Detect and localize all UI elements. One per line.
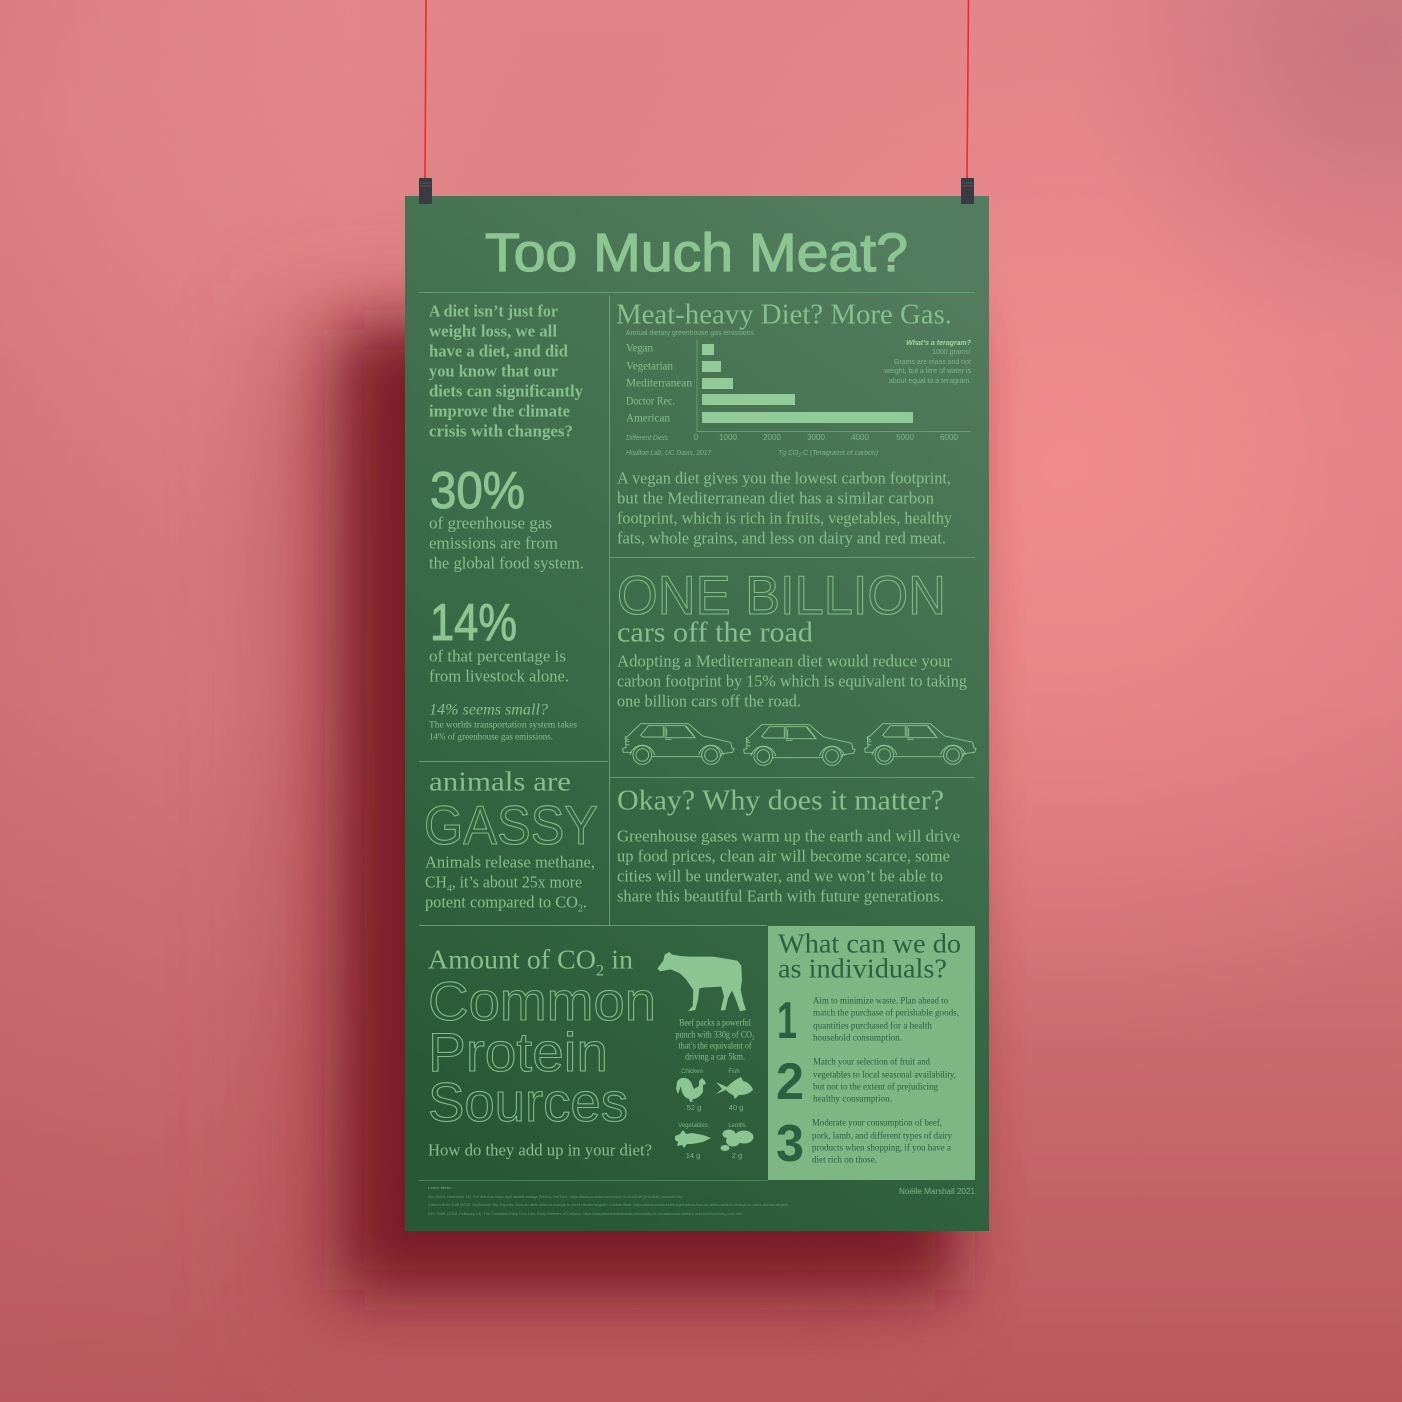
title: Too Much Meat? — [485, 223, 908, 283]
panel: common protein sources: Amount of CO — [428, 945, 590, 975]
step 2: healthy consumption. — [813, 1095, 892, 1105]
panel: why does it matter — [617, 786, 960, 906]
bar chart: 1000 — [719, 433, 737, 442]
bar chart: Vegetarian — [626, 361, 673, 373]
step 1: household consumption. — [813, 1034, 902, 1044]
intro text: A diet isn’t just for — [429, 302, 558, 321]
icon: carrot — [675, 1123, 711, 1160]
icon: fish: Fish — [728, 1069, 740, 1075]
bar chart: Mediterranean — [626, 378, 692, 390]
panel: animals are gassy: Animals release methane, — [425, 853, 595, 872]
bar chart: 2000 — [763, 433, 781, 442]
icon: carrot: 14 g — [686, 1151, 700, 1160]
panel: common protein sources: How do they add up in your diet? — [428, 1141, 652, 1160]
bar chart: 3000 — [807, 433, 825, 442]
icon: chicken — [676, 1069, 706, 1112]
panel: animals are gassy: potent compared to CO — [425, 893, 579, 912]
references — [428, 1186, 788, 1216]
one billion text block: one billion cars off the road. — [617, 692, 801, 711]
step 2 — [776, 1053, 956, 1111]
step 1: quantities purchased for a health — [813, 1021, 932, 1032]
icon: chicken: Chicken — [681, 1069, 703, 1075]
panel heading: What can we do — [778, 929, 961, 959]
icon: chicken: 52 g — [687, 1103, 701, 1112]
bar chart: 2 — [797, 453, 801, 459]
beef text block: Beef packs a powerful — [679, 1018, 751, 1029]
references: Carbon Brief Staff (2020, September 18). Experts: How do diets need to change to meet climate targets? Carbon Brief. https://www.carbonbrief.org/experts-how-do-diets-need-to-change-to-meet-climate-targets — [428, 1203, 788, 1207]
step 2: Match your selection of fruit and — [813, 1057, 930, 1068]
note: 14% seems small: 14% seems small? — [429, 702, 548, 719]
bar chart: Different Diets — [626, 433, 668, 442]
panel: common protein sources — [428, 945, 656, 1160]
bar chart: Houlton Lab, UC Davis, 2017 — [626, 448, 712, 457]
beef text block — [676, 1018, 754, 1063]
callout: what's a teragram: What’s a teragram? — [906, 340, 972, 347]
poster shadow — [285, 320, 955, 1320]
heading: one billion: ONE BILLION — [617, 564, 946, 626]
panel: common protein sources: in — [604, 945, 634, 975]
bar chart — [626, 328, 971, 459]
panel: common protein sources: Common — [428, 970, 656, 1032]
note: 14% seems small — [429, 702, 577, 743]
callout: what's a teragram: Grams are mass and not — [894, 359, 971, 366]
stat: 30%: emissions are from — [429, 534, 558, 553]
panel: common protein sources: 2 — [596, 963, 604, 980]
credit: Noëlle Marshall 2021 — [899, 1187, 976, 1196]
panel: why does it matter: up food prices, clean air will become scarce, some — [617, 847, 950, 866]
step 1: 1 — [777, 992, 797, 1050]
icon: fish: 40 g — [729, 1103, 743, 1112]
step 3: 3 — [776, 1115, 804, 1173]
bar chart: 4000 — [851, 433, 869, 442]
intro text: improve the climate — [429, 402, 570, 421]
intro text: have a diet, and did — [429, 342, 568, 361]
icon: lentils: Lentils — [728, 1123, 746, 1129]
heading: one billion: cars off the road — [617, 618, 813, 649]
beef text block: driving a car 5km. — [685, 1053, 745, 1063]
step 3: diet rich on those. — [812, 1156, 877, 1166]
step 2: but not to the extent of prejudicing — [813, 1082, 938, 1093]
vegan text block: footprint, which is rich in fruits, vegetables, healthy — [617, 509, 953, 528]
stat: 30%: the global food system. — [429, 554, 584, 573]
panel: animals are gassy: GASSY — [424, 794, 598, 856]
panel: why does it matter: share this beautiful Earth with future generations. — [617, 887, 944, 906]
bar chart: 0 — [694, 433, 699, 442]
panel heading — [778, 929, 961, 984]
callout: what's a teragram: about equal to a teragram. — [889, 378, 971, 385]
bar chart: -C (Teragrams of carbon) — [801, 448, 878, 457]
intro text — [429, 302, 584, 441]
icon: lentils: 2 g — [732, 1151, 742, 1160]
panel heading: as individuals? — [778, 954, 947, 984]
panel: animals are gassy: CH — [425, 873, 448, 892]
one billion text block: carbon footprint by 15% which is equivalent to taking — [617, 672, 967, 691]
layout dividers — [419, 292, 975, 1180]
stat: 30% — [429, 462, 584, 573]
one billion text block — [617, 652, 967, 711]
bar chart: Vegan — [626, 343, 653, 355]
step 3: pork, lamb, and different types of dairy — [812, 1131, 952, 1142]
beef text block: that’s the equivalent of — [678, 1041, 752, 1052]
icon: lentils — [720, 1123, 754, 1160]
panel: common protein sources: Sources — [428, 1071, 628, 1133]
panel: animals are gassy: . — [583, 893, 587, 912]
vegan text block: A vegan diet gives you the lowest carbon footprint, — [617, 469, 951, 488]
step 1: Aim to minimize waste. Plan ahead to — [813, 997, 948, 1007]
bar chart: Annual dietary greenhouse gas emissions — [626, 328, 754, 337]
references: Vox (2019, December 12). The diet that helps fight climate change [Video]. YouTube. https://www.youtube.com/watch?v=nUsG4KQIHjU&ab_channel=Vox — [428, 1195, 683, 1199]
vegan text block: but the Mediterranean diet has a similar carbon — [617, 489, 934, 508]
panel: animals are gassy: animals are — [429, 767, 571, 797]
intro text: you know that our — [429, 362, 558, 381]
beef text block: punch with 330g of CO — [676, 1031, 765, 1041]
panel: animals are gassy: 2 — [578, 904, 583, 915]
callout: what's a teragram: 1000 grams! — [932, 349, 971, 356]
bar chart: Tg CO — [778, 448, 800, 457]
step 3: Moderate your consumption of beef, — [812, 1118, 942, 1129]
note: 14% seems small: The worlds transportation system takes — [429, 721, 577, 731]
panel: why does it matter: Greenhouse gases warm up the earth and will drive — [617, 827, 960, 846]
clips — [419, 178, 974, 204]
step 3: products when shopping, if you have a — [812, 1143, 952, 1154]
poster sheet — [405, 196, 989, 1231]
callout: what's a teragram — [883, 340, 972, 385]
icon: fish — [716, 1069, 753, 1112]
vegan text block — [617, 469, 953, 548]
stat: 14%: from livestock alone. — [429, 667, 569, 686]
beef text block: 2 — [752, 1036, 754, 1042]
references: Learn More: — [428, 1186, 452, 1190]
icons: three cars — [623, 724, 976, 765]
step 1: match the purchase of perishable goods, — [813, 1008, 959, 1019]
panel: why does it matter: cities will be underwater, and we won’t be able to — [617, 867, 943, 886]
panel: common protein sources: Protein — [428, 1021, 608, 1083]
panel: what can we do — [768, 926, 975, 1180]
one billion text block: Adopting a Mediterranean diet would reduce your — [617, 652, 953, 671]
bar chart: 6000 — [940, 433, 958, 442]
panel: animals are gassy: 4 — [447, 884, 452, 895]
step 2: vegetables to local seasonal availability, — [813, 1071, 956, 1081]
panel: why does it matter: Okay? Why does it matter? — [617, 786, 944, 817]
stat: 14%: 14% — [430, 594, 517, 652]
icon: cow — [657, 952, 746, 1011]
note: 14% seems small: 14% of greenhouse gas emissions. — [429, 732, 553, 743]
bar chart: American — [626, 413, 670, 425]
stat: 14%: of that percentage is — [429, 647, 566, 666]
stat: 30%: of greenhouse gas — [429, 514, 552, 533]
icon: carrot: Vegetables — [678, 1123, 708, 1129]
references: DFC Staff. (2018, February 14). The Canadian Dairy Cow Diet. Dairy Farmers of Canada. https://dairyfarmersofcanada.ca/en/dairy-in-canada/cows-welfare-and-nutrition/dairy-cow-diet — [428, 1212, 742, 1216]
stat: 14% — [429, 594, 569, 686]
step 1 — [777, 992, 959, 1050]
bar chart: Doctor Rec. — [626, 396, 675, 408]
callout: what's a teragram: weight, but a litre of water is — [883, 368, 971, 375]
intro text: weight loss, we all — [429, 322, 557, 341]
panel: animals are gassy: , it’s about 25x more — [452, 873, 582, 892]
hanging strings — [425, 0, 968, 180]
stat: 30%: 30% — [430, 462, 525, 520]
step 3 — [776, 1115, 952, 1173]
step 2: 2 — [776, 1053, 804, 1111]
vegan text block: fats, whole grains, and less on dairy and red meat. — [617, 529, 946, 548]
intro text: diets can significantly — [429, 382, 584, 401]
intro text: crisis with changes? — [429, 422, 573, 441]
heading: meat-heavy diet: Meat-heavy Diet? More Gas. — [616, 300, 952, 331]
panel: animals are gassy — [424, 767, 598, 915]
bar chart: 5000 — [896, 433, 914, 442]
